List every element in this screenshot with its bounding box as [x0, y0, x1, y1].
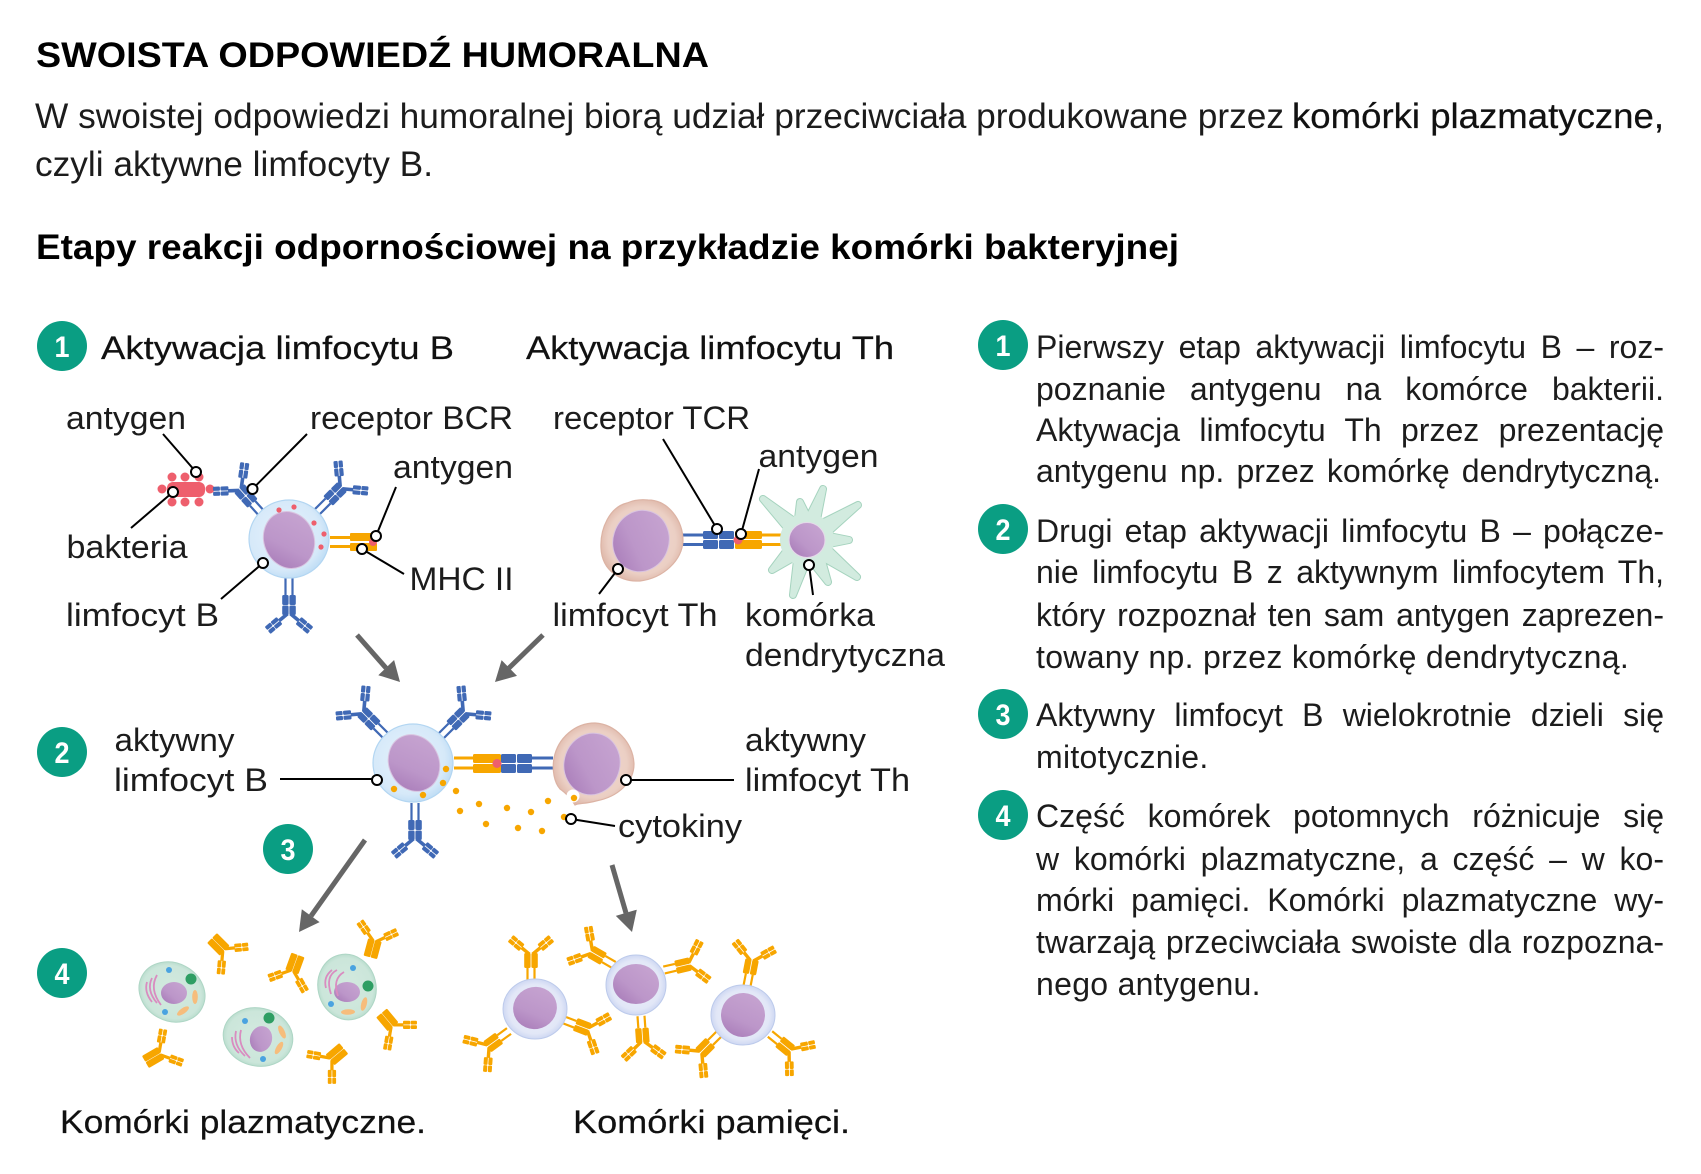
illustration: Th lymphocyte with dendritic cell [601, 489, 858, 595]
vesicle [566, 790, 580, 802]
heading: activation of B lymphocyte: Aktywacja limfocytu B [101, 330, 454, 366]
active Th cell body [553, 723, 634, 805]
arrow: Th cell to step 2 [495, 635, 543, 682]
labels: step 1: receptor BCR [310, 400, 513, 436]
memory cells with antibodies [459, 922, 820, 1082]
caption: plasma cells: Komórki plazmatyczne. [60, 1104, 426, 1140]
badge 1 left [37, 321, 87, 371]
leader lines and markers [131, 434, 814, 826]
B cell nucleus [255, 504, 323, 576]
illustration: active B and Th cells joined [331, 681, 634, 859]
labels: step 1: antygen [66, 400, 186, 436]
labels: step 1: antygen [758, 438, 878, 474]
labels: step 2: aktywny [114, 722, 234, 758]
paragraph 1: antygenu np. przez komórkę dendrytyczną. [1036, 453, 1661, 489]
cytokines [391, 766, 577, 834]
paragraph 1 [1036, 329, 1664, 489]
arrow: to memory cells [612, 865, 637, 932]
heading: activation of Th lymphocyte: Aktywacja limfocytu Th [526, 330, 894, 366]
MHC II [330, 533, 377, 551]
illustration: B lymphocyte with bacterium [158, 456, 377, 634]
arrow: B cell to step 2 [357, 635, 400, 682]
badge 3 left: 3 [280, 834, 296, 867]
labels: step 1 [66, 400, 945, 673]
badge 4 left: 4 [54, 958, 70, 991]
antigen fragments in cell [276, 504, 327, 550]
badge 2 right [978, 504, 1028, 554]
labels: step 1: antygen [393, 449, 513, 485]
badge 2 right: 2 [996, 514, 1010, 547]
paragraph 4: mórki pamięci. Komórki plazmatyczne wy- [1036, 882, 1664, 918]
free antibodies [134, 918, 421, 1088]
antigen [492, 759, 502, 768]
plasma cell 2 [218, 1001, 298, 1073]
paragraph 2: Drugi etap aktywacji limfocytu B – połącze- [1036, 513, 1664, 549]
BCR receptors [208, 456, 373, 634]
subheading: Etapy reakcji odpornościowej na przykładzie komórki bakteryjnej [36, 228, 1179, 267]
memory cell 3 [711, 985, 775, 1045]
paragraph 1: Pierwszy etap aktywacji limfocytu B – roz- [1036, 329, 1664, 365]
paragraph 3: Aktywny limfocyt B wielokrotnie dzieli się [1036, 697, 1664, 733]
title: SWOISTA ODPOWIEDŹ HUMORALNA [36, 35, 709, 75]
caption: memory cells: Komórki pamięci. [573, 1104, 850, 1140]
paragraph 1: Aktywacja limfocytu Th przez prezentację [1036, 412, 1664, 448]
MHC [454, 754, 501, 773]
badge 3 right [978, 689, 1028, 739]
labels: step 1: receptor TCR [553, 400, 750, 436]
MHC on dendritic cell [735, 531, 783, 549]
paragraph 3 [1036, 697, 1664, 775]
paragraph 4: w komórki plazmatyczne, a część – w ko- [1036, 841, 1664, 877]
paragraph 4: Część komórek potomnych różnicuje się [1036, 798, 1664, 834]
memory cell antibodies [459, 922, 820, 1082]
BCR receptors [331, 681, 496, 859]
active B cell body [373, 724, 453, 802]
plasma cell 1 [128, 950, 216, 1034]
memory cell 1 [503, 979, 567, 1039]
badge 1 right [978, 320, 1028, 370]
paragraph 2: towany np. przez komórkę dendrytyczną. [1036, 639, 1629, 675]
labels: step 1: MHC II [410, 561, 514, 597]
intro text: komórki plazmatyczne, [1292, 97, 1664, 136]
badge 3 left [263, 824, 313, 874]
paragraph 4: twarzają przeciwciała swoiste dla rozpozna- [1036, 924, 1664, 960]
intro text: W swoistej odpowiedzi humoralnej biorą udział przeciwciała produkowane przez [35, 97, 1284, 136]
labels: step 1: komórka [745, 597, 875, 633]
B cell body [249, 500, 329, 578]
labels: step 1: dendrytyczna [745, 637, 945, 673]
Th cell body [601, 500, 683, 581]
intro text [35, 97, 1664, 184]
arrow: to plasma cells [299, 840, 365, 932]
badge 4 left [37, 948, 87, 998]
paragraph 3: mitotycznie. [1036, 739, 1209, 775]
antigen [734, 536, 742, 544]
badge 4 right: 4 [996, 800, 1011, 833]
badge 1 left: 1 [54, 331, 70, 364]
labels: step 2: cytokiny [618, 808, 742, 844]
badge 4 right [978, 790, 1028, 840]
active Th cell nucleus [557, 727, 627, 801]
dendritic cell [763, 489, 858, 595]
active B cell nucleus [379, 726, 449, 800]
bacterium [158, 472, 214, 506]
plasma cells and antibodies [128, 918, 421, 1088]
thin receptor stems [683, 534, 704, 546]
paragraph 4 [1036, 798, 1664, 1002]
TCR [501, 754, 553, 773]
intro text: czyli aktywne limfocyty B. [35, 145, 433, 184]
labels: step 2 [114, 722, 910, 844]
paragraph 2: nie limfocytu B z aktywnym limfocytem Th, [1036, 554, 1664, 590]
TCR receptor [703, 531, 734, 549]
badge 3 right: 3 [996, 699, 1010, 732]
labels: step 2: aktywny [745, 722, 866, 758]
labels: step 2: limfocyt Th [745, 762, 910, 798]
badge 2 left [37, 727, 87, 777]
Th cell nucleus [605, 503, 677, 579]
paragraph 4: nego antygenu. [1036, 966, 1261, 1002]
badge 1 right: 1 [996, 330, 1010, 363]
labels: step 1: limfocyt B [66, 597, 219, 633]
memory cell 2 [606, 955, 666, 1015]
plasma cell 3 [311, 948, 383, 1026]
paragraph 1: poznanie antygenu na komórce bakterii. [1036, 371, 1664, 407]
paragraph 2: który rozpoznał ten sam antygen zaprezen- [1036, 597, 1664, 633]
badge 2 left: 2 [54, 737, 70, 770]
labels: step 1: limfocyt Th [552, 597, 718, 633]
labels: step 1: bakteria [66, 529, 188, 565]
antigen on MHC [369, 538, 377, 546]
labels: step 2: limfocyt B [114, 762, 268, 798]
paragraph 2 [1036, 513, 1664, 675]
